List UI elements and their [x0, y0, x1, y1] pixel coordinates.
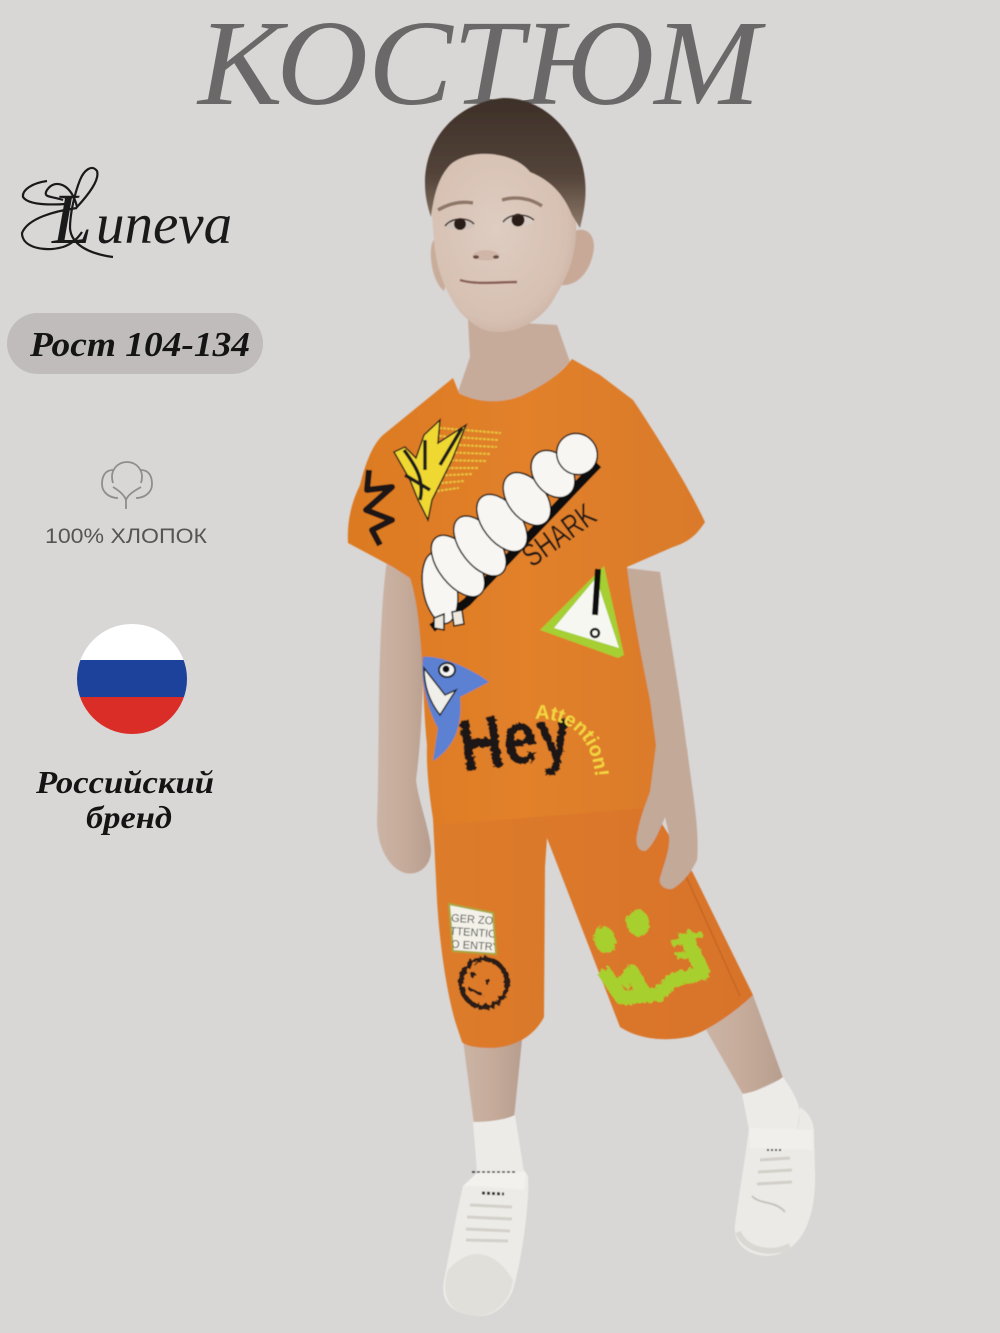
shorts patch: warning label: NGER ZONE — [443, 912, 509, 929]
right ear — [560, 230, 594, 285]
right arm — [626, 568, 690, 800]
shirt print: hey lettering: Hey — [454, 690, 576, 788]
shorts print: green smiley — [592, 908, 703, 998]
shorts patch: warning label — [448, 902, 498, 956]
title: КОСТЮМ — [196, 0, 767, 131]
front leg and sock — [463, 1040, 524, 1172]
cotton icon — [102, 462, 152, 509]
nose — [472, 250, 500, 260]
neck — [458, 320, 570, 405]
left arm — [377, 560, 431, 873]
russian brand caption: бренд — [86, 799, 172, 835]
right shoe — [735, 1107, 815, 1256]
shirt print: summer bubble lettering — [417, 425, 606, 630]
head — [425, 98, 594, 332]
russian brand caption — [35, 764, 214, 835]
brand logo: L — [51, 179, 92, 259]
hair — [425, 98, 586, 228]
shirt print: shark tag: SHARK — [515, 496, 602, 574]
shorts print: drawn smile circle — [461, 959, 507, 1007]
height badge: Рост 104-134 — [29, 325, 250, 364]
shorts patch: warning label: ATTENTION — [443, 925, 505, 941]
cotton label: 100% ХЛОПОК — [45, 525, 208, 548]
shorts patch: warning label: NO ENTRY — [443, 938, 501, 954]
shirt print: warning triangle — [540, 566, 624, 658]
shorts — [433, 805, 753, 1048]
t-shirt — [348, 359, 705, 825]
eyes — [445, 214, 534, 230]
right hand — [636, 730, 698, 889]
brand logo: uneva — [96, 193, 232, 256]
back leg and sock — [705, 995, 800, 1130]
brows — [438, 198, 542, 210]
mouth — [460, 280, 517, 283]
boy figure — [347, 97, 816, 1316]
shirt print: attention lettering: Attention! — [535, 704, 610, 776]
shirt print: yellow burst and spray — [394, 420, 500, 520]
left ear — [431, 240, 450, 291]
left shoe — [443, 1170, 528, 1316]
brand logo — [22, 168, 232, 259]
height badge — [7, 313, 263, 374]
russian flag — [77, 624, 187, 734]
shirt print: black sleeve scrawl — [366, 470, 392, 545]
shirt print: blue shark — [422, 657, 489, 761]
face — [431, 144, 576, 332]
russian brand caption: Российский — [35, 764, 214, 800]
